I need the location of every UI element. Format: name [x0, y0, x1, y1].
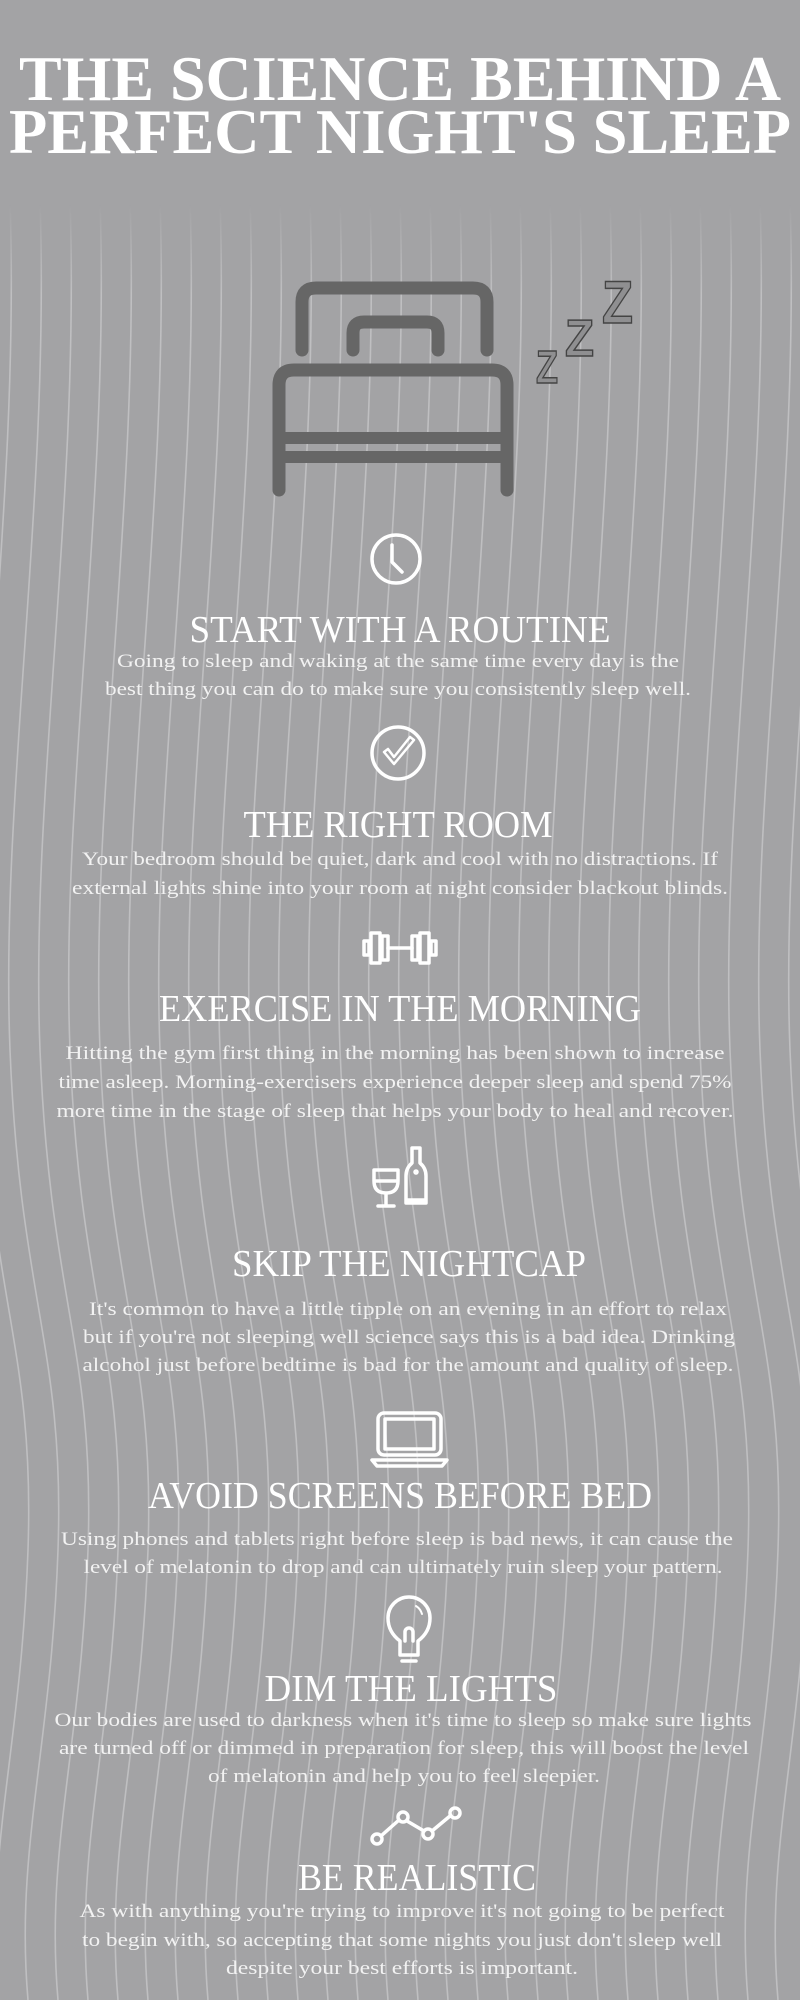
- body: lights: are turned off or dimmed in preparation for sleep, this will boost the level: [59, 1738, 749, 1759]
- body: realistic: [80, 1901, 725, 1979]
- body: realistic: As with anything you're trying to improve it's not going to be perfect: [80, 1901, 725, 1922]
- title: [9, 43, 791, 167]
- icon: zzz: Z: [536, 341, 558, 393]
- body: right room: [72, 849, 728, 899]
- icon: line chart: [372, 1808, 460, 1844]
- body: screens: Using phones and tablets right before sleep is bad news, it can cause the: [61, 1529, 733, 1550]
- section: screens: [61, 1413, 733, 1578]
- heading: the right room: THE RIGHT ROOM: [244, 804, 552, 846]
- body: routine: best thing you can do to make sure you consistently sleep well.: [105, 679, 691, 700]
- icon: zzz: Z: [602, 269, 633, 336]
- section: right room: [72, 727, 728, 899]
- heading: start with a routine: START WITH A ROUTINE: [190, 609, 610, 651]
- body: lights: [54, 1710, 752, 1787]
- section: exercise: [56, 933, 734, 1122]
- body: nightcap: but if you're not sleeping well science says this is a bad idea. Drinking: [83, 1327, 736, 1348]
- icon: dumbbell: [364, 933, 436, 963]
- heading: dim the lights: DIM THE LIGHTS: [264, 1668, 558, 1710]
- body: exercise: [56, 1043, 734, 1122]
- body: routine: [105, 651, 691, 700]
- body: exercise: time asleep. Morning-exercisers experience deeper sleep and spend 75%: [58, 1072, 732, 1093]
- body: realistic: despite your best efforts is important.: [226, 1958, 578, 1979]
- section: nightcap: [82, 1148, 736, 1376]
- icon: bulb: [388, 1597, 430, 1661]
- heading: avoid screens: AVOID SCREENS BEFORE BED: [148, 1475, 652, 1517]
- body: nightcap: [82, 1299, 736, 1376]
- heading: be realistic: BE REALISTIC: [298, 1857, 536, 1899]
- body: right room: Your bedroom should be quiet, dark and cool with no distractions. If: [82, 849, 719, 870]
- body: realistic: to begin with, so accepting that some nights you just don't sleep well: [82, 1930, 722, 1951]
- icon: wine: [374, 1148, 426, 1206]
- icon: zzz: Z: [565, 310, 594, 368]
- body: nightcap: alcohol just before bedtime is bad for the amount and quality of sleep.: [82, 1355, 734, 1376]
- section: routine: [105, 535, 691, 700]
- body: exercise: more time in the stage of sleep that helps your body to heal and recover.: [56, 1101, 734, 1122]
- heading: exercise: EXERCISE IN THE MORNING: [159, 988, 641, 1030]
- body: screens: level of melatonin to drop and can ultimately ruin sleep your pattern.: [84, 1557, 722, 1578]
- body: routine: Going to sleep and waking at the same time every day is the: [117, 651, 679, 672]
- icon: clock: [372, 535, 420, 583]
- body: nightcap: It's common to have a little tipple on an evening in an effort to relax: [89, 1299, 728, 1320]
- icon: bed: [279, 288, 507, 490]
- title: PERFECT NIGHT'S SLEEP: [9, 96, 791, 167]
- icon: zzz: [536, 269, 633, 393]
- section: dim the lights: [54, 1597, 752, 1787]
- title: THE SCIENCE BEHIND A: [19, 43, 781, 114]
- body: right room: external lights shine into your room at night consider blackout blinds.: [72, 878, 728, 899]
- body: lights: of melatonin and help you to feel sleepier.: [208, 1766, 600, 1787]
- section: be realistic: [80, 1808, 725, 1979]
- body: exercise: Hitting the gym first thing in the morning has been shown to increase: [66, 1043, 724, 1064]
- heading: skip the nightcap: SKIP THE NIGHTCAP: [232, 1243, 586, 1285]
- icon: laptop: [372, 1413, 447, 1466]
- icon: check: [372, 727, 424, 779]
- body: screens: [61, 1529, 733, 1578]
- body: lights: Our bodies are used to darkness when it's time to sleep so make sure lights: [54, 1710, 752, 1731]
